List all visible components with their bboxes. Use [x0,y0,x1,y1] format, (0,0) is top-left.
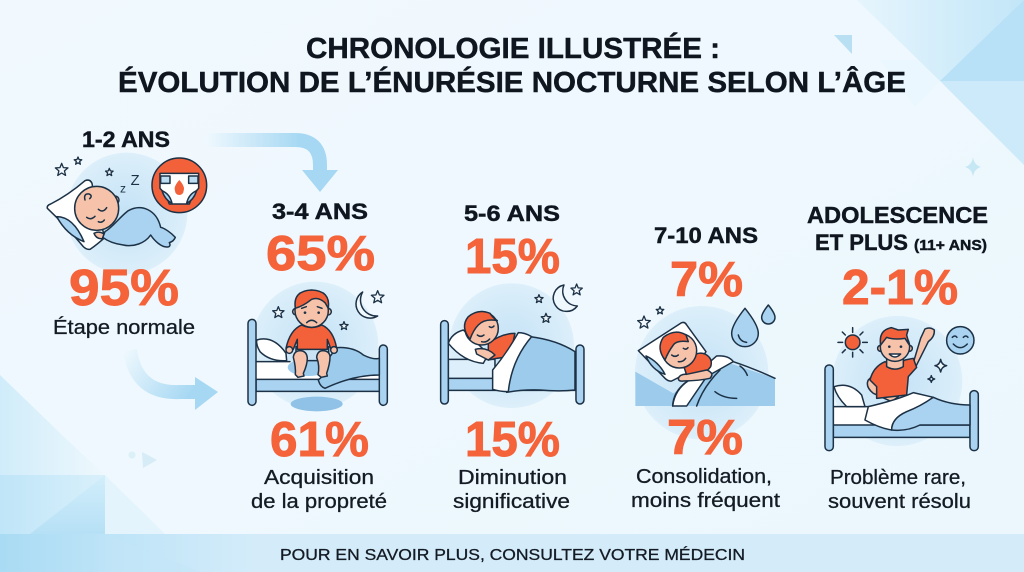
panel: 3-4 ans [248,199,387,513]
icon: sleeping baby: z [120,182,126,196]
caption: Diminution [458,467,567,489]
icon: diaper [152,158,207,213]
caption: significative [453,491,570,513]
caption [453,467,570,513]
caption: Consolidation, [636,466,772,488]
caption: Acquisition [264,467,374,489]
stat: 2-1%: 2-1% [842,261,958,315]
panel: 5-6 ans [441,201,584,513]
age heading: 5-6 ANS [464,201,560,226]
panel: 7-10 ans [631,223,780,512]
age heading: (11+ ANS) [914,237,987,254]
arrow: 95% to 3-4 ans bed [130,350,218,410]
age heading: 3-4 ANS [272,199,368,224]
age heading: ADOLESCENCE [807,202,988,228]
age heading: ET PLUS [815,230,908,255]
panel: 1-2 ans [47,127,207,339]
panel: adolescence et plus [807,202,988,513]
caption [828,467,971,513]
stat: 65%: 65% [266,227,375,281]
stat: 61%: 61% [270,413,369,467]
footer band [0,534,1024,572]
icon: waking teenager waving [825,316,978,451]
stat: 15%: 15% [465,413,560,467]
caption: moins fréquent [631,490,780,512]
title: CHRONOLOGIE ILLUSTRÉE : [306,33,720,65]
title [118,33,906,99]
caption: Problème rare, [830,467,966,489]
icon: sleeping baby: Z [131,173,140,189]
caption: Étape normale [53,316,195,339]
arrow: 1-2 ans to 3-4 ans [205,140,338,192]
caption: de la propreté [251,491,387,513]
footer band: POUR EN SAVOIR PLUS, CONSULTEZ VOTRE MÉDECIN [280,545,745,564]
caption [631,466,780,512]
stat: 7%: 7% [667,411,743,465]
stat: 15%: 15% [465,230,560,284]
age heading: 7-10 ANS [654,223,758,248]
caption: souvent résolu [828,491,971,513]
caption [251,467,387,513]
age heading: 1-2 ANS [82,127,170,152]
icon: child sitting on wet bed [248,282,387,411]
stat: 95%: 95% [69,259,179,316]
stat: 7%: 7% [670,253,743,307]
icon: child asleep with water drops [635,305,775,439]
age heading [807,202,988,255]
icon: sleeping baby [47,153,187,274]
icon: child asleep in bed [441,283,584,408]
title: ÉVOLUTION DE L’ÉNURÉSIE NOCTURNE SELON L’ÂGE [118,67,906,99]
